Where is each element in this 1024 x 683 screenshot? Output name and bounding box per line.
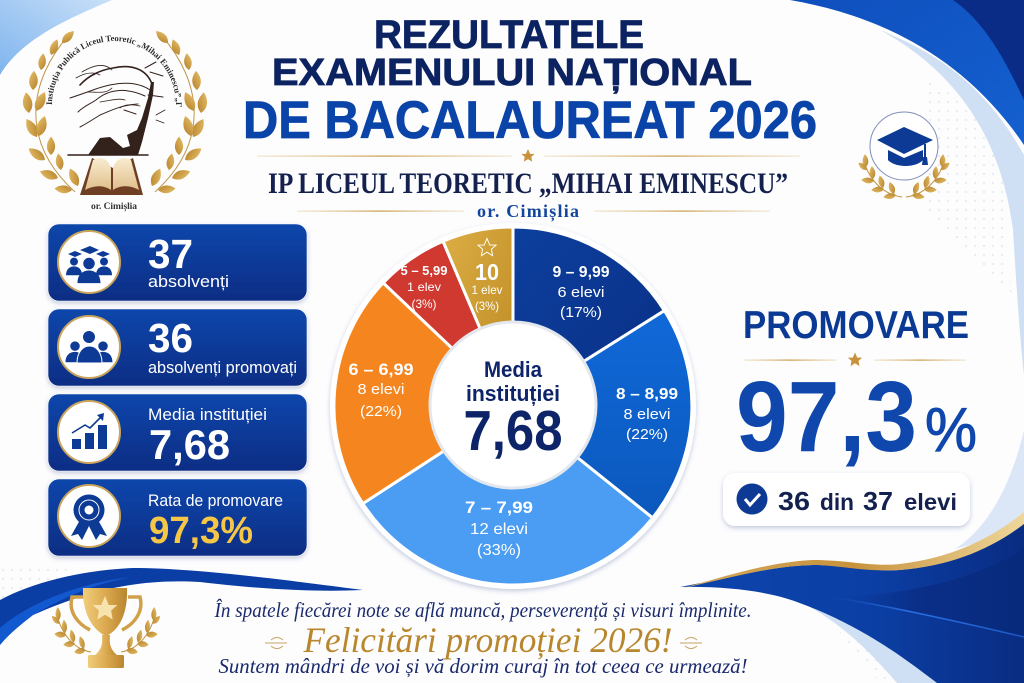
closing line 2: congratulations: Felicitări promoției 2026! bbox=[303, 620, 672, 660]
stat card: graduates bbox=[48, 224, 307, 301]
stat card: institution average: 7,68 bbox=[149, 421, 230, 468]
icon: rising bar chart bbox=[58, 401, 120, 463]
school name: IP LICEUL TEORETIC „MIHAI EMINESCU” bbox=[268, 167, 788, 200]
label: 9 – 9,99: 6 elevi bbox=[558, 284, 604, 301]
logo: tree and face silhouette bbox=[68, 62, 165, 155]
title bbox=[243, 13, 817, 150]
logo: open book bbox=[80, 158, 143, 195]
background: top-left corner swoosh bbox=[0, 0, 112, 75]
background: bottom-right swoosh bbox=[680, 512, 1024, 683]
promotion heading: PROMOVARE bbox=[743, 304, 969, 347]
background: right pale curve bbox=[955, 430, 1024, 549]
title divider with star bbox=[257, 149, 800, 162]
label: 6 – 6,99: 8 elevi bbox=[358, 381, 404, 398]
label: 10: 10 bbox=[475, 259, 499, 285]
label: 10 bbox=[472, 238, 502, 313]
slice: 6 – 6,99 bbox=[334, 283, 513, 504]
label: 7 – 7,99: (33%) bbox=[477, 542, 521, 559]
label: 5 – 5,99: 1 elev bbox=[407, 280, 441, 294]
label: 8 – 8,99: 8 – 8,99 bbox=[616, 386, 678, 403]
pill: 36 din 37 elevi: 37 bbox=[863, 486, 893, 516]
donut centre: average: Media bbox=[484, 357, 543, 382]
slice: 10 bbox=[443, 227, 513, 406]
stat card: promotion rate: 97,3% bbox=[149, 510, 253, 552]
pill: 36 din 37 elevi bbox=[723, 473, 970, 526]
graduation cap emblem bbox=[857, 112, 951, 200]
stat card: graduates: absolvenți bbox=[148, 272, 229, 291]
logo: circular institution name: Instituția Publică Liceul Teoretic „Mihai Eminescu”„Γ bbox=[46, 35, 182, 107]
closing line 1: În spatele fiecărei note se află muncă, perseverență și visuri împlinite. bbox=[214, 598, 751, 622]
trophy with laurels bbox=[50, 588, 162, 668]
label: 8 – 8,99: 8 elevi bbox=[624, 406, 670, 423]
title line 1: REZULTATELE bbox=[374, 13, 644, 57]
donut centre: average bbox=[430, 322, 596, 488]
label: 9 – 9,99: (17%) bbox=[560, 304, 602, 321]
label: 8 – 8,99: (22%) bbox=[626, 426, 668, 443]
pill: 36 din 37 elevi: elevi bbox=[904, 489, 957, 515]
label: 7 – 7,99 bbox=[465, 498, 533, 559]
title line 2: EXAMENULUI NAȚIONAL bbox=[272, 52, 752, 94]
school logo bbox=[22, 31, 208, 212]
slice: 7 – 7,99 bbox=[363, 406, 653, 585]
stat card: institution average bbox=[48, 394, 307, 471]
icon: laurel under cap bbox=[857, 154, 951, 200]
promotion rate value: 97,3 bbox=[736, 361, 917, 473]
pill: 36 din 37 elevi: 36 bbox=[778, 486, 810, 516]
donut chart: grade distribution bbox=[330, 223, 696, 589]
background: top-right swoosh bbox=[790, 0, 1024, 375]
promotion rate value: % bbox=[925, 396, 977, 465]
slice: 5 – 5,99 bbox=[383, 241, 513, 406]
stat card: promoted graduates: absolvenți promovați bbox=[148, 358, 297, 377]
label: 6 – 6,99 bbox=[348, 360, 414, 420]
donut centre: average: 7,68 bbox=[464, 399, 562, 463]
label: 7 – 7,99: 12 elevi bbox=[470, 521, 528, 538]
slice: 9 – 9,99 bbox=[513, 227, 664, 406]
label: 5 – 5,99: 5 – 5,99 bbox=[400, 263, 448, 278]
logo: town name: or. Cimișlia bbox=[91, 202, 137, 212]
background: bottom-left swoosh bbox=[0, 568, 363, 645]
icon: graduation cap bbox=[877, 127, 933, 166]
icon: three graduates bbox=[58, 231, 120, 293]
ornament left of congratulations bbox=[265, 638, 287, 648]
label: 6 – 6,99: 6 – 6,99 bbox=[348, 360, 414, 379]
stat card: promoted graduates: 36 bbox=[148, 315, 193, 361]
stat card: promoted graduates bbox=[48, 309, 307, 386]
stat card: promotion rate bbox=[48, 479, 307, 556]
label: 6 – 6,99: (22%) bbox=[360, 403, 402, 420]
slice: 8 – 8,99 bbox=[513, 311, 692, 518]
logo: laurel wreath bbox=[22, 28, 208, 194]
label: 5 – 5,99: (3%) bbox=[412, 297, 436, 311]
town name with rules: or. Cimișlia bbox=[477, 201, 579, 222]
label: 9 – 9,99: 9 – 9,99 bbox=[552, 264, 610, 281]
icon: award rosette bbox=[58, 485, 120, 547]
icon: group of people bbox=[58, 316, 120, 378]
promotion divider bbox=[744, 352, 966, 366]
label: 8 – 8,99 bbox=[616, 386, 678, 443]
label: 10: (3%) bbox=[475, 299, 499, 313]
pill: 36 din 37 elevi: din bbox=[820, 489, 854, 515]
stat card: institution average: Media instituției bbox=[148, 405, 267, 424]
donut centre: average: instituției bbox=[466, 381, 560, 406]
label: 7 – 7,99: 7 – 7,99 bbox=[465, 498, 533, 517]
title line 3: DE BACALAUREAT 2026 bbox=[243, 91, 817, 150]
label: 9 – 9,99 bbox=[552, 264, 610, 321]
stat card: graduates: 37 bbox=[148, 231, 193, 277]
trophy laurels bbox=[50, 607, 162, 655]
label: 5 – 5,99 bbox=[400, 263, 448, 311]
promotion panel bbox=[723, 304, 977, 526]
trophy cup bbox=[71, 588, 141, 668]
closing line 3: Suntem mândri de voi și vă dorim curaj în tot ceea ce urmează! bbox=[218, 654, 748, 678]
ornament right of congratulations bbox=[680, 638, 702, 648]
closing message bbox=[214, 598, 751, 678]
stat card: promotion rate: Rata de promovare bbox=[148, 491, 283, 510]
label: 10: 1 elev bbox=[472, 283, 502, 297]
